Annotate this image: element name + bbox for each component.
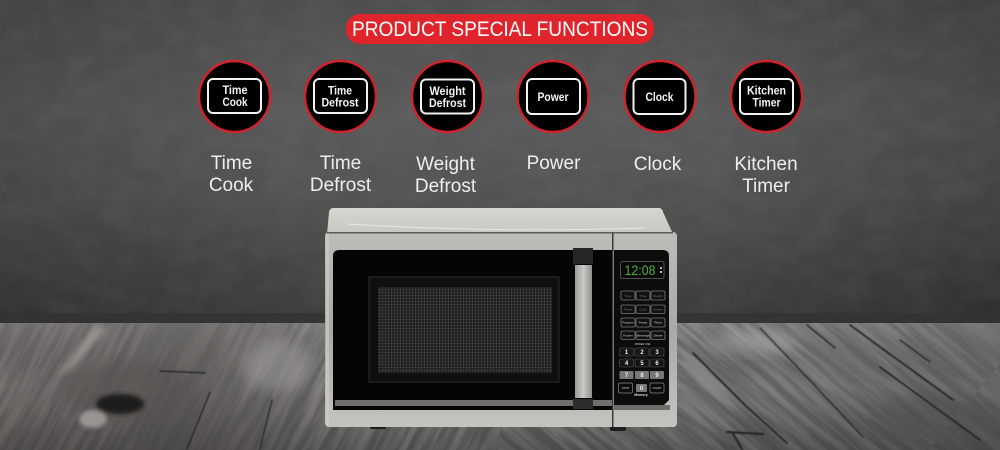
label: clock: Clock bbox=[634, 154, 682, 175]
control panel bbox=[614, 250, 670, 410]
icon: time cook: Time bbox=[222, 83, 248, 97]
key labels: Weight bbox=[653, 294, 663, 298]
number keys bbox=[618, 348, 664, 397]
icon: kitchen timer: Timer bbox=[752, 96, 781, 110]
label: weight defrost bbox=[415, 154, 477, 197]
number keys: 7 bbox=[625, 373, 629, 379]
label: time cook: Time bbox=[211, 153, 252, 174]
number keys: START bbox=[653, 386, 662, 390]
key labels: Dinner bbox=[654, 334, 662, 338]
key labels: Frozen bbox=[623, 334, 633, 338]
number keys: 6 bbox=[655, 361, 659, 367]
label: weight defrost: Weight bbox=[416, 154, 476, 175]
label: weight defrost: Defrost bbox=[415, 176, 477, 197]
label: kitchen timer: Timer bbox=[742, 176, 791, 197]
number keys: 3 bbox=[655, 350, 659, 356]
icon: weight defrost: Defrost bbox=[429, 96, 466, 110]
icon: power bbox=[518, 61, 588, 132]
key labels: Time bbox=[625, 294, 632, 298]
icon: time defrost: Time bbox=[328, 84, 352, 98]
key labels: Clock bbox=[639, 308, 647, 312]
label: time defrost: Time bbox=[320, 153, 361, 174]
key labels: Time bbox=[640, 294, 647, 298]
microwave door window bbox=[333, 250, 612, 410]
icon: weight defrost bbox=[412, 61, 483, 132]
background: wooden floor bbox=[0, 323, 1000, 450]
key labels: Power bbox=[624, 308, 632, 312]
icon: weight defrost: Weight bbox=[430, 84, 466, 98]
number keys: 5 bbox=[640, 361, 644, 367]
icon: time cook bbox=[199, 61, 270, 132]
icon: time defrost bbox=[305, 61, 376, 132]
wood cracks bbox=[160, 325, 980, 449]
label: power: Power bbox=[527, 153, 581, 174]
icon: time cook: Cook bbox=[222, 95, 248, 109]
label: time defrost: Defrost bbox=[310, 175, 372, 196]
microwave top panel bbox=[327, 208, 673, 234]
number keys: 4 bbox=[625, 361, 629, 367]
label: kitchen timer: Kitchen bbox=[734, 154, 798, 175]
title pill: PRODUCT SPECIAL FUNCTIONS bbox=[352, 18, 648, 41]
microwave feet bbox=[370, 425, 626, 431]
label: kitchen timer bbox=[734, 154, 798, 197]
key labels: Beverage bbox=[637, 334, 650, 338]
number keys: 9 bbox=[655, 373, 659, 379]
icon: time defrost: Defrost bbox=[322, 96, 358, 110]
icon: kitchen timer bbox=[731, 61, 802, 132]
key labels: Kitchen bbox=[653, 308, 663, 312]
microwave body bbox=[325, 232, 677, 427]
number keys: 1 bbox=[625, 350, 629, 356]
microwave bbox=[325, 208, 677, 431]
key labels: Pizza bbox=[654, 320, 662, 324]
key labels: Popcorn bbox=[622, 320, 634, 324]
key labels bbox=[622, 294, 663, 346]
number keys: Memory bbox=[634, 393, 648, 397]
number keys: 0 bbox=[640, 386, 644, 392]
display: 12:08 bbox=[624, 262, 656, 278]
key labels: Potato bbox=[639, 320, 648, 324]
label: time cook bbox=[209, 153, 254, 196]
icon: power: Power bbox=[538, 90, 569, 104]
number keys: STOP bbox=[622, 386, 629, 390]
background: wall bbox=[0, 0, 1000, 324]
icon: clock: Clock bbox=[646, 90, 674, 104]
function keys bbox=[621, 291, 665, 340]
label: time cook: Cook bbox=[209, 175, 254, 196]
number keys: 2 bbox=[640, 350, 644, 356]
number keys: 8 bbox=[640, 373, 644, 379]
microwave handle bbox=[573, 248, 593, 409]
label: time defrost bbox=[310, 153, 372, 196]
key labels: POWER ONE bbox=[635, 343, 651, 346]
microwave mesh bbox=[369, 277, 559, 382]
icon: clock bbox=[624, 61, 696, 132]
icon: kitchen timer: Kitchen bbox=[747, 84, 786, 98]
